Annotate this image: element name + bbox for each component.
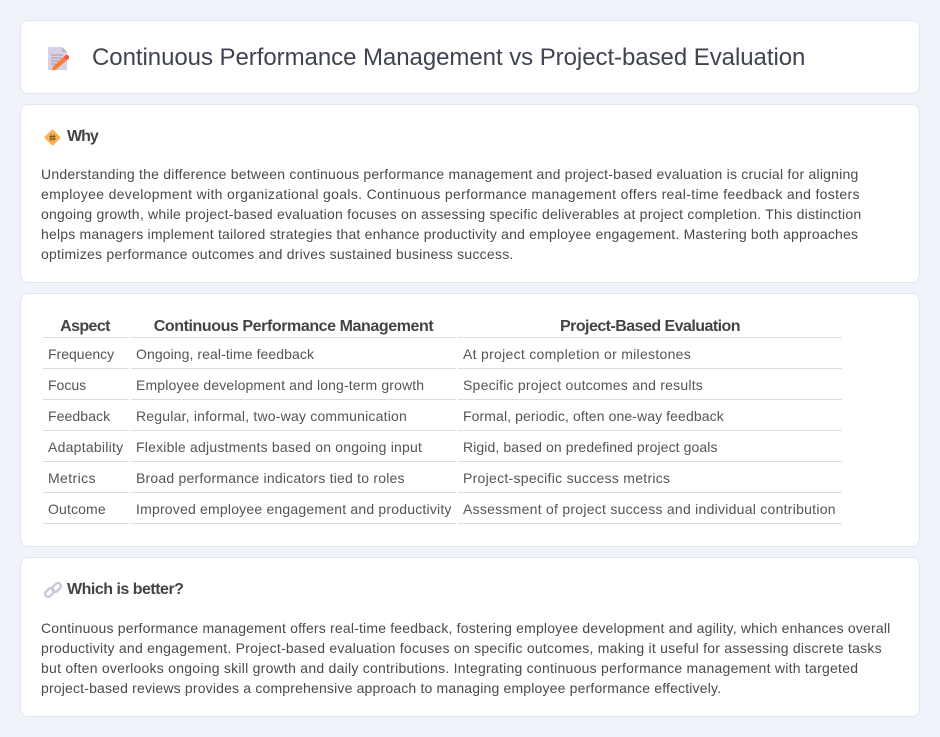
row: focus: Employee development and long-term growth (136, 377, 424, 393)
row: feedback: Regular, informal, two-way communication (136, 408, 407, 424)
row: adaptability (48, 439, 718, 455)
table header (60, 318, 740, 335)
row: outcome: Outcome (48, 501, 106, 517)
row: adaptability: Flexible adjustments based on ongoing input (136, 439, 422, 455)
text block: why: helps managers implement tailored strategies that enhance productivity and employee engagement. Mastering both approaches (41, 226, 858, 242)
table header: Aspect (60, 318, 110, 335)
table header: Continuous Performance Management (154, 318, 433, 335)
row: outcome (48, 501, 836, 517)
row: frequency: Ongoing, real-time feedback (136, 346, 314, 362)
text block: which is better: project-based reviews provides a comprehensive approach to managing employee performance effectively. (41, 680, 721, 696)
row: feedback (48, 408, 724, 424)
text block: why: optimizes performance outcomes and drives sustained business success. (41, 246, 514, 262)
text block: why: employee development with organizational goals. Continuous performance management offers real-time feedback and fosters (41, 186, 860, 202)
text block: which is better: productivity and engagement. Project-based evaluation focuses on specific outcomes, making it useful for assessing discrete tasks (41, 640, 882, 656)
row: frequency (48, 346, 691, 362)
row: metrics (48, 470, 670, 486)
row: metrics: Metrics (48, 470, 96, 486)
row: outcome: Assessment of project success and individual contribution (463, 501, 836, 517)
text block: which is better: but often overlooks ongoing skill growth and daily contributions. Integrating continuous performance management with targeted (41, 660, 858, 676)
panel: comparison table (20, 293, 920, 547)
text block: which is better: Continuous performance management offers real-time feedback, fostering employee development and agility, which enhances overall (41, 620, 890, 636)
row: metrics: Broad performance indicators tied to roles (136, 470, 405, 486)
text block: which is better (41, 620, 890, 696)
row: feedback: Feedback (48, 408, 110, 424)
row: feedback: Formal, periodic, often one-way feedback (463, 408, 724, 424)
text block: why: ongoing growth, while project-based evaluation focuses on assessing specific deliverables at project completion. This distinction (41, 206, 861, 222)
text block: why (41, 166, 861, 262)
row: adaptability: Rigid, based on predefined project goals (463, 439, 718, 455)
row: metrics: Project-specific success metrics (463, 470, 670, 486)
icon: memo with pencil (48, 47, 69, 70)
row: frequency: At project completion or milestones (463, 346, 691, 362)
text block: why: Understanding the difference between continuous performance management and project-based evaluation is crucial for aligning (41, 166, 859, 182)
row: focus: Specific project outcomes and results (463, 377, 703, 393)
row: adaptability: Adaptability (48, 439, 123, 455)
title: Continuous Performance Management vs Project-based Evaluation (92, 44, 805, 71)
panel: which is better (20, 557, 920, 717)
row: focus (48, 377, 703, 393)
panel: why (20, 104, 920, 283)
row: focus: Focus (48, 377, 86, 393)
row: frequency: Frequency (48, 346, 114, 362)
icon: link (44, 582, 62, 598)
table header: Project-Based Evaluation (560, 318, 740, 335)
heading: why: Why (67, 128, 98, 145)
icon: diamond sign (44, 130, 60, 146)
heading: which is better: Which is better? (67, 581, 183, 598)
row: outcome: Improved employee engagement and productivity (136, 501, 452, 517)
panel: header (20, 20, 920, 94)
